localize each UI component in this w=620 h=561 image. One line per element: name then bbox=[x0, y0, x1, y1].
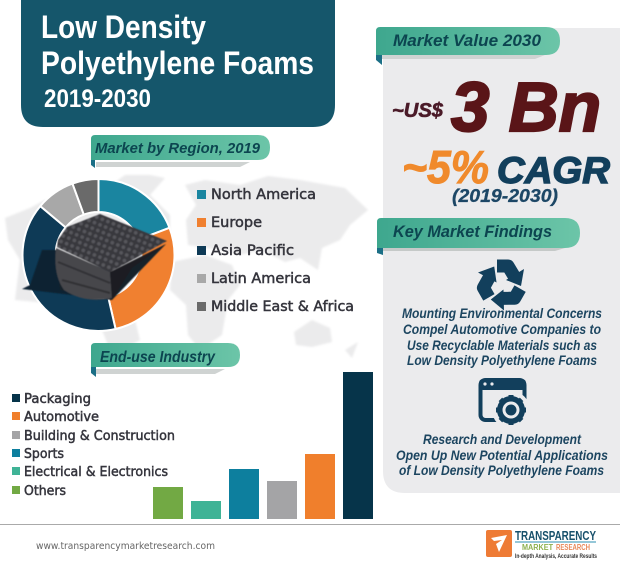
slice: Middle East and Africa bbox=[72, 179, 98, 215]
slice: Latin America bbox=[40, 184, 84, 227]
donut chart: market by region bbox=[23, 179, 175, 331]
world map background bbox=[5, 175, 368, 358]
logo: Transparency Market Research: RESEARCH bbox=[556, 543, 590, 552]
bar chart: end-use industry bbox=[153, 372, 373, 519]
logo: Transparency Market Research: TRANSPARENCY bbox=[515, 528, 596, 543]
legend: regions: Europe bbox=[211, 215, 262, 231]
legend: end-use industries: Packaging bbox=[24, 392, 91, 407]
legend: regions: Latin America bbox=[211, 271, 311, 287]
text: research and development finding bbox=[396, 431, 608, 478]
footer website: www.transparencymarketresearch.com bbox=[36, 541, 215, 552]
icon: browser window with gear bbox=[479, 379, 530, 429]
legend: end-use industries bbox=[12, 392, 175, 499]
logo: Transparency Market Research: MARKET bbox=[522, 543, 553, 552]
legend: regions: Middle East & Africa bbox=[211, 299, 354, 315]
tag: market value 2030 bbox=[376, 27, 560, 65]
tag: market value 2030: Market Value 2030 bbox=[393, 31, 542, 50]
CAGR figure bbox=[402, 141, 610, 206]
legend: end-use industries: Automotive bbox=[24, 410, 99, 425]
tag: key market findings: Key Market Findings bbox=[393, 222, 552, 241]
tag: market by region bbox=[91, 135, 270, 168]
slice: Asia Pacific bbox=[23, 206, 116, 331]
logo: Transparency Market Research bbox=[486, 528, 597, 560]
legend: regions: Asia Pacific bbox=[211, 243, 294, 259]
CAGR figure: CAGR bbox=[497, 150, 610, 191]
tag: end-use industry: End-use Industry bbox=[100, 349, 216, 366]
text: research and development finding: Research and Development bbox=[423, 431, 582, 447]
text: recyclable materials finding bbox=[402, 305, 602, 368]
CAGR figure: (2019-2030) bbox=[452, 186, 558, 206]
legend: regions: North America bbox=[211, 187, 316, 203]
panel: key findings background bbox=[383, 28, 620, 493]
foam product image bbox=[22, 214, 167, 300]
tag: key market findings bbox=[377, 218, 580, 255]
title: Polyethylene Foams bbox=[41, 45, 314, 81]
tag: end-use industry bbox=[91, 343, 240, 377]
legend: end-use industries: Sports bbox=[24, 447, 64, 462]
title years: 2019-2030 bbox=[44, 85, 151, 113]
market value figure: ~US$ bbox=[392, 100, 444, 122]
title bbox=[41, 9, 314, 81]
legend: end-use industries: Electrical & Electronics bbox=[24, 465, 168, 480]
tag: market by region: Market by Region, 2019 bbox=[95, 140, 261, 157]
legend: end-use industries: Others bbox=[24, 484, 66, 499]
icon: recycling arrows bbox=[475, 264, 524, 312]
panel: title banner bbox=[21, 0, 335, 127]
legend: end-use industries: Building & Construction bbox=[24, 429, 175, 444]
title: Low Density bbox=[41, 9, 206, 45]
slice: North America bbox=[98, 179, 170, 240]
market value figure: 3 Bn bbox=[451, 68, 601, 146]
legend: regions bbox=[197, 187, 354, 315]
CAGR figure: ~5% bbox=[402, 141, 489, 193]
slice: Europe bbox=[108, 228, 175, 329]
